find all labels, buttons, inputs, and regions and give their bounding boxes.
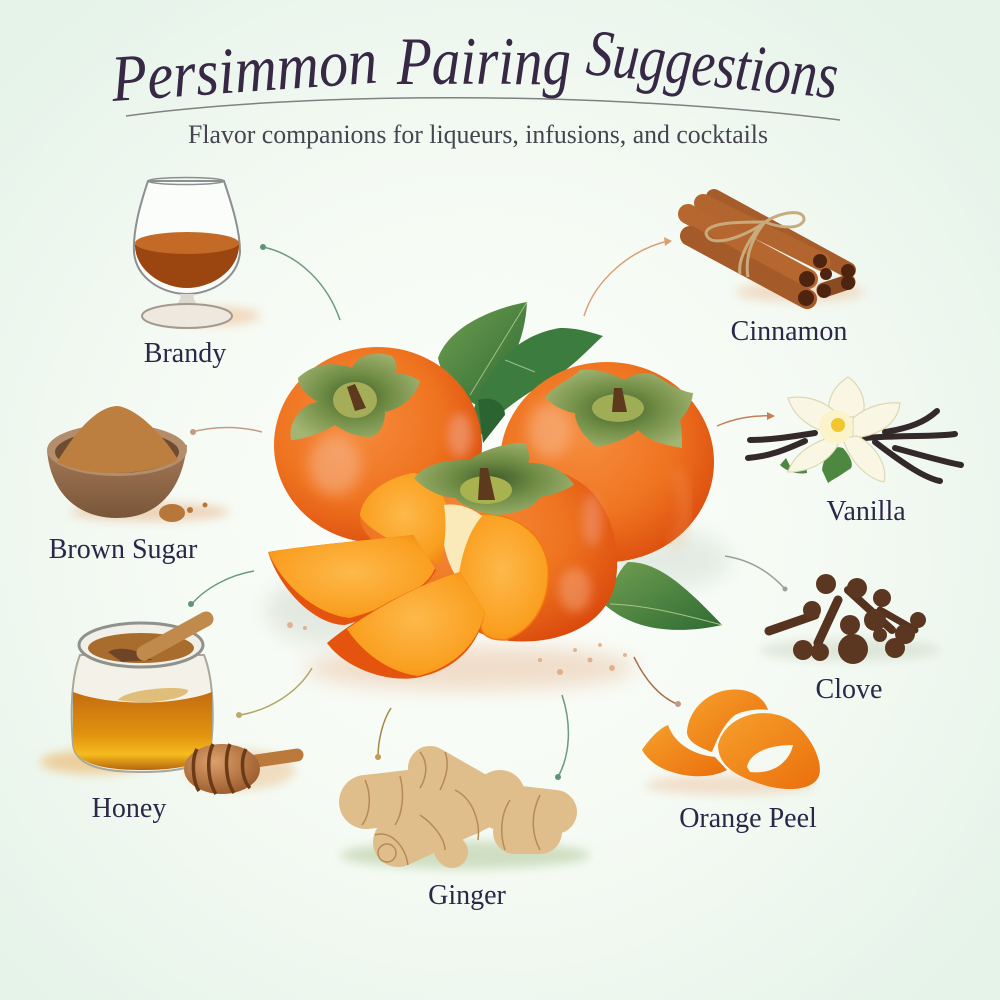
icon: cinnamon bundle xyxy=(688,197,865,306)
leaves behind fruit xyxy=(438,302,722,630)
icon: cloves xyxy=(760,574,940,664)
icon: vanilla flower xyxy=(748,377,961,483)
label: honey: Honey xyxy=(92,793,166,824)
arrow: honey top xyxy=(188,571,254,607)
title underline xyxy=(126,98,840,120)
arrow: brown sugar xyxy=(190,428,262,435)
arrow: vanilla xyxy=(717,412,775,426)
subtitle: Flavor companions for liqueurs, infusions, and cocktails xyxy=(188,120,768,149)
arrow: brandy xyxy=(260,244,340,320)
label: vanilla: Vanilla xyxy=(826,496,906,527)
arrow: clove xyxy=(725,556,788,592)
label: cinnamon: Cinnamon xyxy=(731,316,847,347)
label: brown sugar: Brown Sugar xyxy=(49,534,198,565)
title xyxy=(108,16,841,116)
arrow: cinnamon xyxy=(584,237,672,316)
icon: brandy glass xyxy=(134,178,260,328)
persimmon slices xyxy=(268,535,485,679)
right persimmon xyxy=(500,362,714,562)
icon: ginger xyxy=(340,752,590,869)
arrow: ginger right xyxy=(555,695,568,780)
calyx xyxy=(290,353,420,440)
calyx xyxy=(414,443,574,515)
cut flesh xyxy=(360,473,448,565)
title: Pairing xyxy=(396,23,571,99)
connector arrows xyxy=(188,237,788,780)
label: clove: Clove xyxy=(816,674,882,705)
icon: honey jar xyxy=(40,619,297,794)
left persimmon xyxy=(274,347,482,543)
calyx xyxy=(545,370,693,448)
icon: brown sugar bowl xyxy=(47,406,230,522)
icon: orange peel xyxy=(642,690,820,795)
front cut persimmon xyxy=(360,443,617,642)
label: brandy: Brandy xyxy=(144,338,226,369)
arrow: ginger left xyxy=(375,708,391,760)
label: ginger: Ginger xyxy=(428,880,507,911)
arrow: honey bottom xyxy=(236,668,312,718)
label: orange peel: Orange Peel xyxy=(679,803,817,834)
ground shadow and spice dust xyxy=(265,530,730,690)
arrow: orange peel xyxy=(634,657,681,707)
title: Suggestions xyxy=(584,16,841,113)
title: Persimmon xyxy=(108,25,379,116)
central persimmon illustration xyxy=(265,302,730,690)
